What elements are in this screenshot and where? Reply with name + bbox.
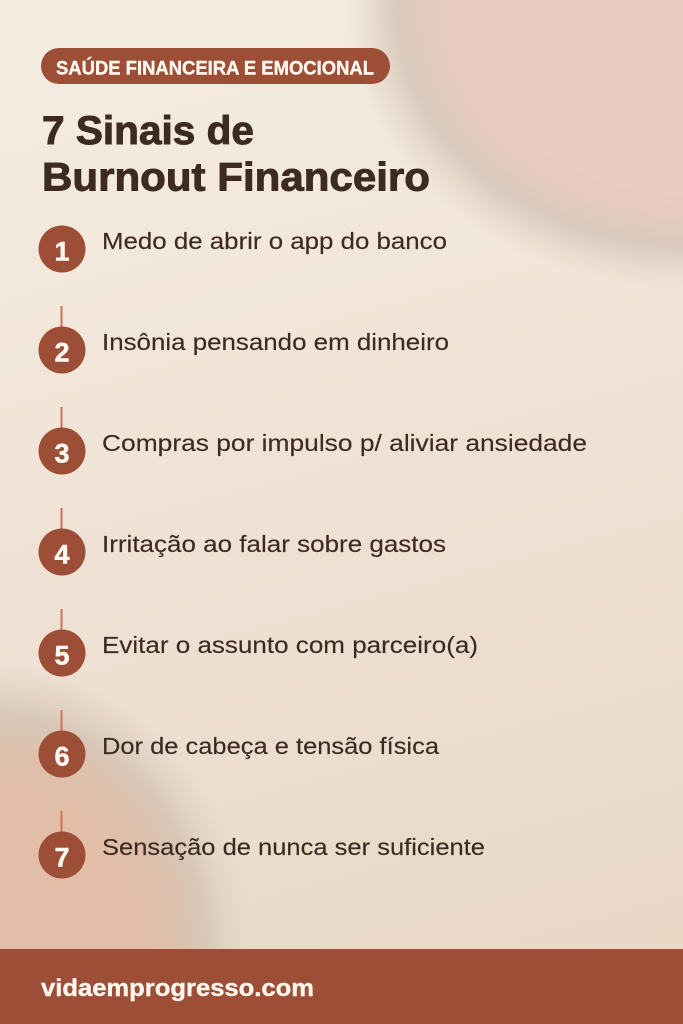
item 7: Sensação de nunca ser suficiente bbox=[102, 834, 485, 860]
footer bar: vidaemprogresso.com bbox=[41, 975, 314, 1002]
item 4: Irritação ao falar sobre gastos bbox=[102, 531, 446, 557]
item 6 bbox=[38, 710, 439, 778]
title: Burnout Financeiro bbox=[42, 156, 430, 200]
background blob: top right pink bbox=[340, 0, 683, 300]
category badge: SAÚDE FINANCEIRA E EMOCIONAL bbox=[56, 58, 374, 80]
item 2: Insônia pensando em dinheiro bbox=[102, 329, 449, 355]
item 6: 6 bbox=[54, 742, 70, 772]
item 7: 7 bbox=[54, 842, 70, 872]
title bbox=[42, 109, 430, 200]
item 5 bbox=[38, 609, 478, 676]
footer bar bbox=[0, 949, 683, 1024]
item 4: 4 bbox=[54, 540, 70, 570]
item 5: 5 bbox=[54, 640, 70, 670]
item 6: Dor de cabeça e tensão física bbox=[102, 733, 439, 759]
item 2 bbox=[38, 306, 449, 374]
item 3: Compras por impulso p/ aliviar ansiedade bbox=[102, 430, 587, 456]
category badge bbox=[41, 48, 390, 84]
item 5: Evitar o assunto com parceiro(a) bbox=[102, 632, 478, 658]
item 2: 2 bbox=[54, 338, 70, 368]
item 1 bbox=[38, 226, 447, 272]
item 3: 3 bbox=[54, 438, 70, 468]
item 1: 1 bbox=[54, 236, 70, 266]
background blob: bottom left peach bbox=[0, 660, 260, 949]
item 1: Medo de abrir o app do banco bbox=[102, 228, 447, 254]
title: 7 Sinais de bbox=[42, 109, 254, 153]
item 7 bbox=[38, 811, 485, 878]
item 3 bbox=[38, 407, 587, 474]
item 4 bbox=[38, 508, 446, 576]
